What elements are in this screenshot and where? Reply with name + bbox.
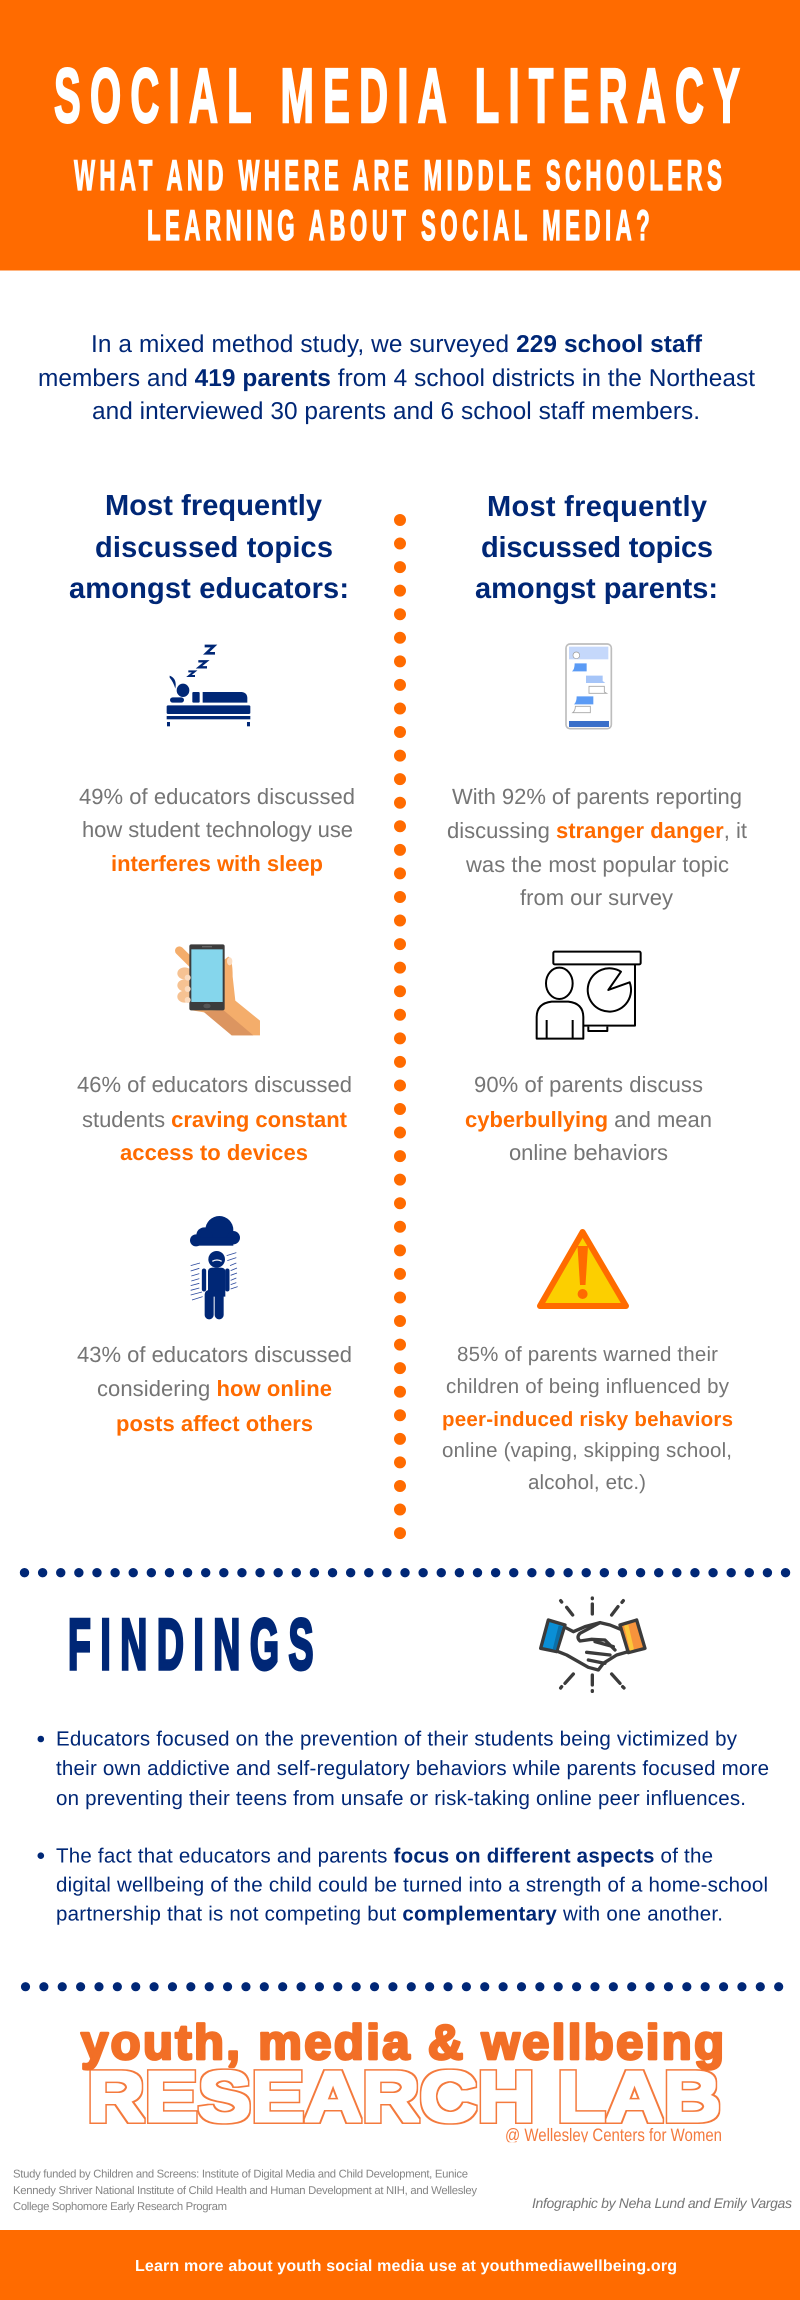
text: peer-induced risky behaviors: children of being influenced by: [446, 1375, 730, 1398]
text: cyberbullying: 90% of parents discuss: [474, 1072, 703, 1097]
text: interferes with sleep: [79, 784, 355, 876]
heading: educators: amongst educators:: [69, 573, 349, 605]
heading: educators: [69, 490, 349, 605]
text: how online posts affect others: considering how online: [97, 1376, 332, 1401]
heading: parents: amongst parents:: [475, 573, 718, 605]
header banner: [0, 0, 800, 270]
bullet two: The fact that educators and parents focus on different aspects of the: [56, 1844, 713, 1868]
text: interferes with sleep: interferes with sleep: [111, 851, 323, 876]
logo: youth media wellbeing research lab: [81, 2016, 724, 2145]
text: stranger danger: from our survey: [520, 885, 673, 910]
heading: educators: discussed topics: [95, 532, 333, 564]
text: cyberbullying: cyberbullying and mean: [465, 1107, 712, 1132]
text: interferes with sleep: 49% of educators discussed: [79, 784, 355, 809]
panel: findings: [38, 1598, 769, 1926]
heading: parents: discussed topics: [481, 532, 713, 564]
text: peer-induced risky behaviors: peer-induced risky behaviors: [442, 1408, 733, 1431]
text: cyberbullying: [465, 1072, 712, 1165]
subtitle: WHAT AND WHERE ARE MIDDLE SCHOOLERS: [74, 152, 722, 200]
title: SOCIAL MEDIA LITERACY: [54, 53, 740, 139]
footer banner: Learn more about youth social media use at youthmediawellbeing.org: [135, 2258, 677, 2275]
navy dotted divider bottom: [26, 1982, 780, 1991]
bullet one: [38, 1728, 769, 1810]
text: peer-induced risky behaviors: [442, 1343, 733, 1494]
intro paragraph: In a mixed method study, we surveyed 229 school staff: [91, 331, 703, 358]
bullet one: Educators focused on the prevention of their students being victimized by: [56, 1728, 738, 1750]
bullet two: digital wellbeing of the child could be turned into a strength of a home-school: [56, 1874, 768, 1896]
funding note: College Sophomore Early Research Program: [13, 2201, 227, 2213]
text: how online posts affect others: [77, 1342, 352, 1436]
subtitle: LEARNING ABOUT SOCIAL MEDIA?: [147, 202, 650, 250]
text: stranger danger: With 92% of parents reporting: [452, 784, 742, 809]
heading: educators: Most frequently: [105, 490, 322, 522]
vertical dotted divider: [394, 520, 406, 1536]
bullet two: partnership that is not competing but complementary with one another.: [56, 1902, 723, 1926]
bullet one: on preventing their teens from unsafe or risk-taking online peer influences.: [56, 1787, 746, 1810]
text: peer-induced risky behaviors: alcohol, etc.): [528, 1471, 646, 1494]
infographic credit: Infographic by Neha Lund and Emily Vargas: [532, 2195, 792, 2211]
intro paragraph: [38, 331, 755, 425]
text: peer-induced risky behaviors: 85% of parents warned their: [457, 1343, 718, 1366]
text: interferes with sleep: how student technology use: [82, 817, 353, 842]
heading: findings: FINDINGS: [68, 1605, 313, 1685]
icon: hand holding phone: [177, 944, 260, 1035]
funding note: Kennedy Shriver National Institute of Child Health and Human Development at NIH, and Wellesley: [13, 2185, 477, 2197]
funding note: Study funded by Children and Screens: Institute of Digital Media and Child Development, Eunice: [13, 2168, 468, 2180]
icon: presenter with pie chart: [537, 952, 641, 1039]
heading: parents: [475, 491, 718, 605]
text: stranger danger: was the most popular topic: [465, 852, 729, 877]
panel: parents column: [442, 491, 747, 1494]
heading: parents: Most frequently: [487, 491, 707, 523]
icon: sleeping in bed: [167, 646, 250, 726]
text: stranger danger: discussing stranger danger, it: [447, 818, 747, 843]
navy dotted divider top: [24, 1568, 790, 1577]
panel: educators column: [69, 490, 355, 1436]
logo: youth media wellbeing: youth, media & wellbeing: [81, 2016, 724, 2070]
text: peer-induced risky behaviors: online (vaping, skipping school,: [442, 1439, 732, 1462]
icon: phone with chat bubbles: [566, 644, 611, 729]
text: cyberbullying: online behaviors: [509, 1140, 668, 1165]
footer banner: [0, 2230, 800, 2300]
text: how online posts affect others: posts affect others: [116, 1411, 313, 1436]
text: craving constant access: [77, 1072, 352, 1165]
text: how online posts affect others: 43% of educators discussed: [77, 1342, 352, 1367]
bullet two: [38, 1844, 768, 1926]
icon: sad person under cloud: [190, 1216, 240, 1319]
intro paragraph: members and 419 parents from 4 school districts in the Northeast: [38, 365, 755, 392]
text: craving constant access: access to devices: [120, 1140, 308, 1165]
funding note: [13, 2168, 477, 2213]
text: craving constant access: 46% of educators discussed: [77, 1072, 352, 1097]
text: craving constant access: students craving constant: [82, 1107, 348, 1132]
icon: handshake: [541, 1598, 645, 1691]
subtitle: [74, 152, 722, 250]
icon: warning triangle: [540, 1232, 626, 1306]
intro paragraph: and interviewed 30 parents and 6 school staff members.: [92, 398, 700, 425]
logo: research lab outline: RESEARCH LAB: [87, 2058, 721, 2137]
bullet one: their own addictive and self-regulatory behaviors while parents focused more: [56, 1757, 769, 1780]
text: stranger danger: [447, 784, 747, 910]
